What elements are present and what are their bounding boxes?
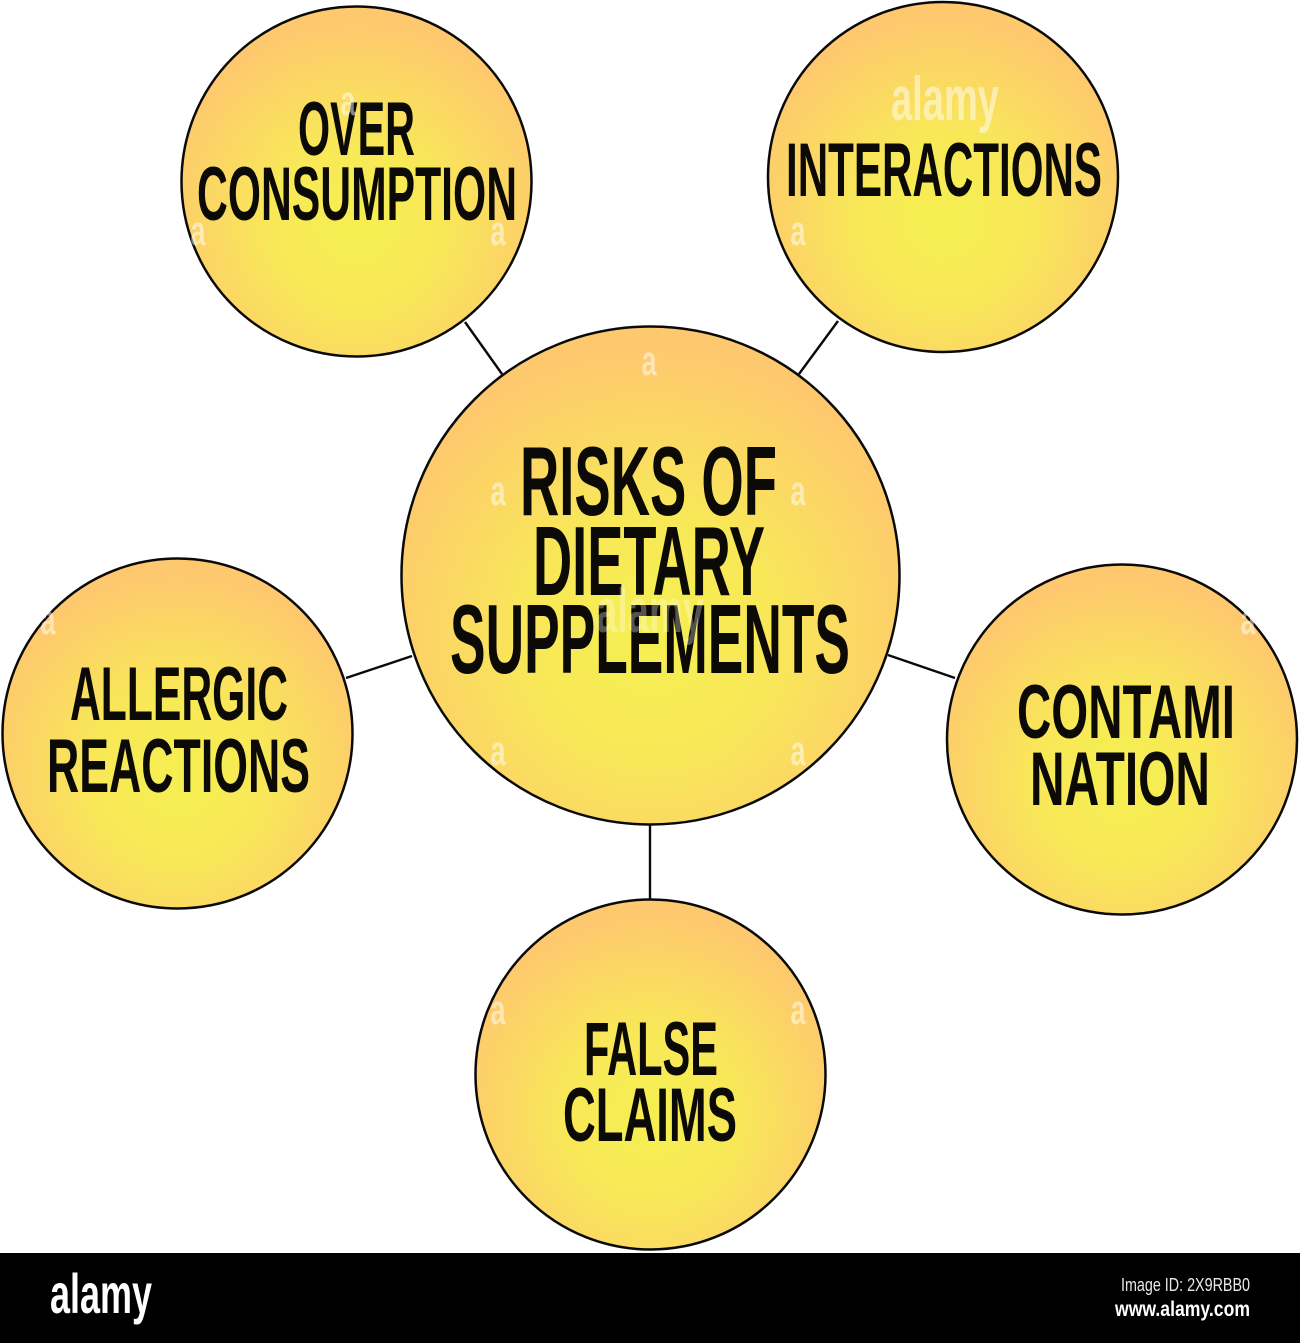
node: over consumption: [182, 6, 532, 356]
node: false claims: FALSE: [584, 1007, 718, 1092]
central node: risks of dietary supplements: [402, 326, 900, 824]
central node: risks of dietary supplements: SUPPLEMENTS: [450, 584, 850, 694]
footer band: [0, 1253, 1300, 1343]
watermark overlay: a: [490, 727, 506, 774]
watermark overlay: a: [642, 337, 657, 384]
node: interactions: [768, 2, 1118, 352]
node: allergic reactions: REACTIONS: [47, 724, 310, 809]
node: false claims: CLAIMS: [563, 1073, 737, 1158]
watermark overlay: a: [490, 207, 506, 254]
watermark overlay: a: [790, 727, 806, 774]
central node: risks of dietary supplements: RISKS OF: [520, 426, 777, 536]
watermark overlay: a: [790, 986, 806, 1033]
node: false claims: [476, 900, 826, 1250]
watermark overlay: a: [190, 207, 206, 254]
watermark overlay: a: [40, 596, 56, 643]
node: over consumption: OVER: [298, 87, 415, 172]
watermark overlay: a: [340, 77, 356, 124]
watermark overlay: a: [490, 467, 506, 514]
watermark overlay: a: [790, 467, 806, 514]
watermark overlay: [40, 65, 1256, 1033]
watermark overlay: alamy: [596, 577, 704, 646]
node: allergic reactions: ALLERGIC: [70, 652, 288, 737]
watermark overlay: alamy: [891, 65, 999, 134]
watermark overlay: a: [1240, 596, 1256, 643]
node: allergic reactions: [2, 558, 352, 908]
node: over consumption: CONSUMPTION: [197, 152, 517, 237]
watermark overlay: a: [490, 986, 506, 1033]
connector lines: [346, 321, 955, 899]
node: contamination: [947, 564, 1297, 914]
central node: risks of dietary supplements: DIETARY: [533, 506, 765, 616]
watermark overlay: a: [790, 207, 806, 254]
footer logo: alamy: alamy: [50, 1262, 152, 1325]
footer website: www.alamy.com: [1114, 1298, 1250, 1321]
footer image id: Image ID: 2X9RBB0: [1121, 1275, 1250, 1295]
